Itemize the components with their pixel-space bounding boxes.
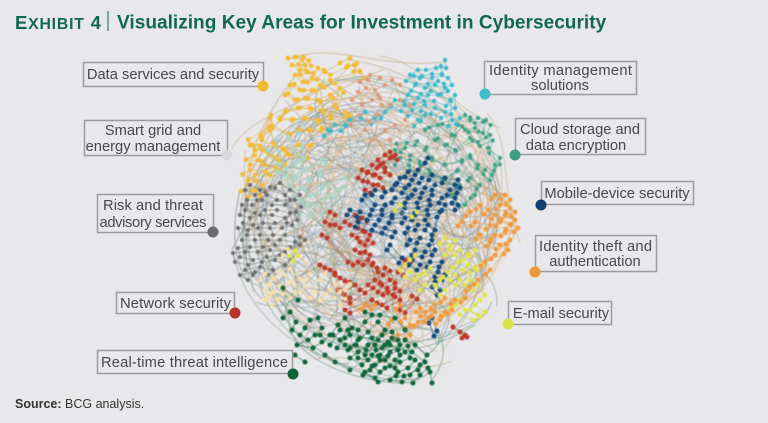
label: e-mail security: E-mail security [513,306,610,322]
dot: navy [536,200,546,210]
label: identity theft and authentication: authentication [549,254,641,270]
label: smart grid and energy management: Smart grid and [105,123,201,139]
dot: lime [502,318,514,330]
dot: teal [510,150,520,160]
label: real-time threat intelligence [98,350,298,380]
label: cloud storage and data encryption [510,118,646,160]
label: risk and threat advisory services: advisory services [100,215,206,231]
cluster: email security, lime [290,205,485,320]
dot: red [230,308,240,318]
cluster: network security, red [320,152,417,313]
label: smart grid and energy management: energy management [86,139,220,155]
label: identity theft and authentication [530,236,656,278]
cluster: pale yellow nodes [260,249,350,305]
dot: cyan [480,88,490,100]
cluster: risk and threat, gray [233,183,305,280]
cluster: cloud storage, teal [390,109,505,211]
label: network security [116,292,240,318]
cluster: salmon nodes [350,75,410,140]
label: cloud storage and data encryption: data encryption [526,138,626,154]
label: identity management solutions: Identity management [489,63,632,79]
label: e-mail security [502,302,612,330]
label: identity management solutions [480,62,636,100]
label: real-time threat intelligence: Real-time threat intelligence [101,355,288,371]
long curved links [188,25,562,411]
title: Visualizing Key Areas for Investment in Cybersecurity [117,12,607,34]
network graph [188,25,562,411]
label: mobile-device security [536,182,694,210]
label: data services and security [84,62,268,92]
cluster: identity theft, orange [361,195,518,339]
cluster: smart grid, mint [259,127,354,223]
source note: Source: BCG analysis. [15,397,144,411]
label: identity management solutions: solutions [531,78,589,94]
dot: gray [208,226,218,238]
label: data services and security: Data services and security [87,67,260,83]
label: risk and threat advisory services [98,194,218,238]
green dense core [320,330,425,382]
cluster: pale slate nodes [335,132,362,172]
cluster: data services, yellow [241,52,367,203]
cluster: real-time threat intelligence, dark green [283,288,432,383]
dot: dark green [288,368,298,380]
dot: light gray [222,150,232,160]
cluster: red tail nodes [453,327,467,338]
title: EXHIBIT 4 [15,12,102,33]
label: smart grid and energy management [84,120,232,160]
label: risk and threat advisory services: Risk and threat [103,198,203,214]
cluster: identity management, cyan [324,60,460,136]
dot: yellow [258,80,268,92]
label: identity theft and authentication: Identity theft and [539,239,652,255]
label: cloud storage and data encryption: Cloud storage and [520,122,640,138]
cluster: mobile-device, navy [347,158,460,336]
dot: orange [530,266,540,278]
label: network security: Network security [120,296,232,312]
label: mobile-device security: Mobile-device security [544,186,690,202]
